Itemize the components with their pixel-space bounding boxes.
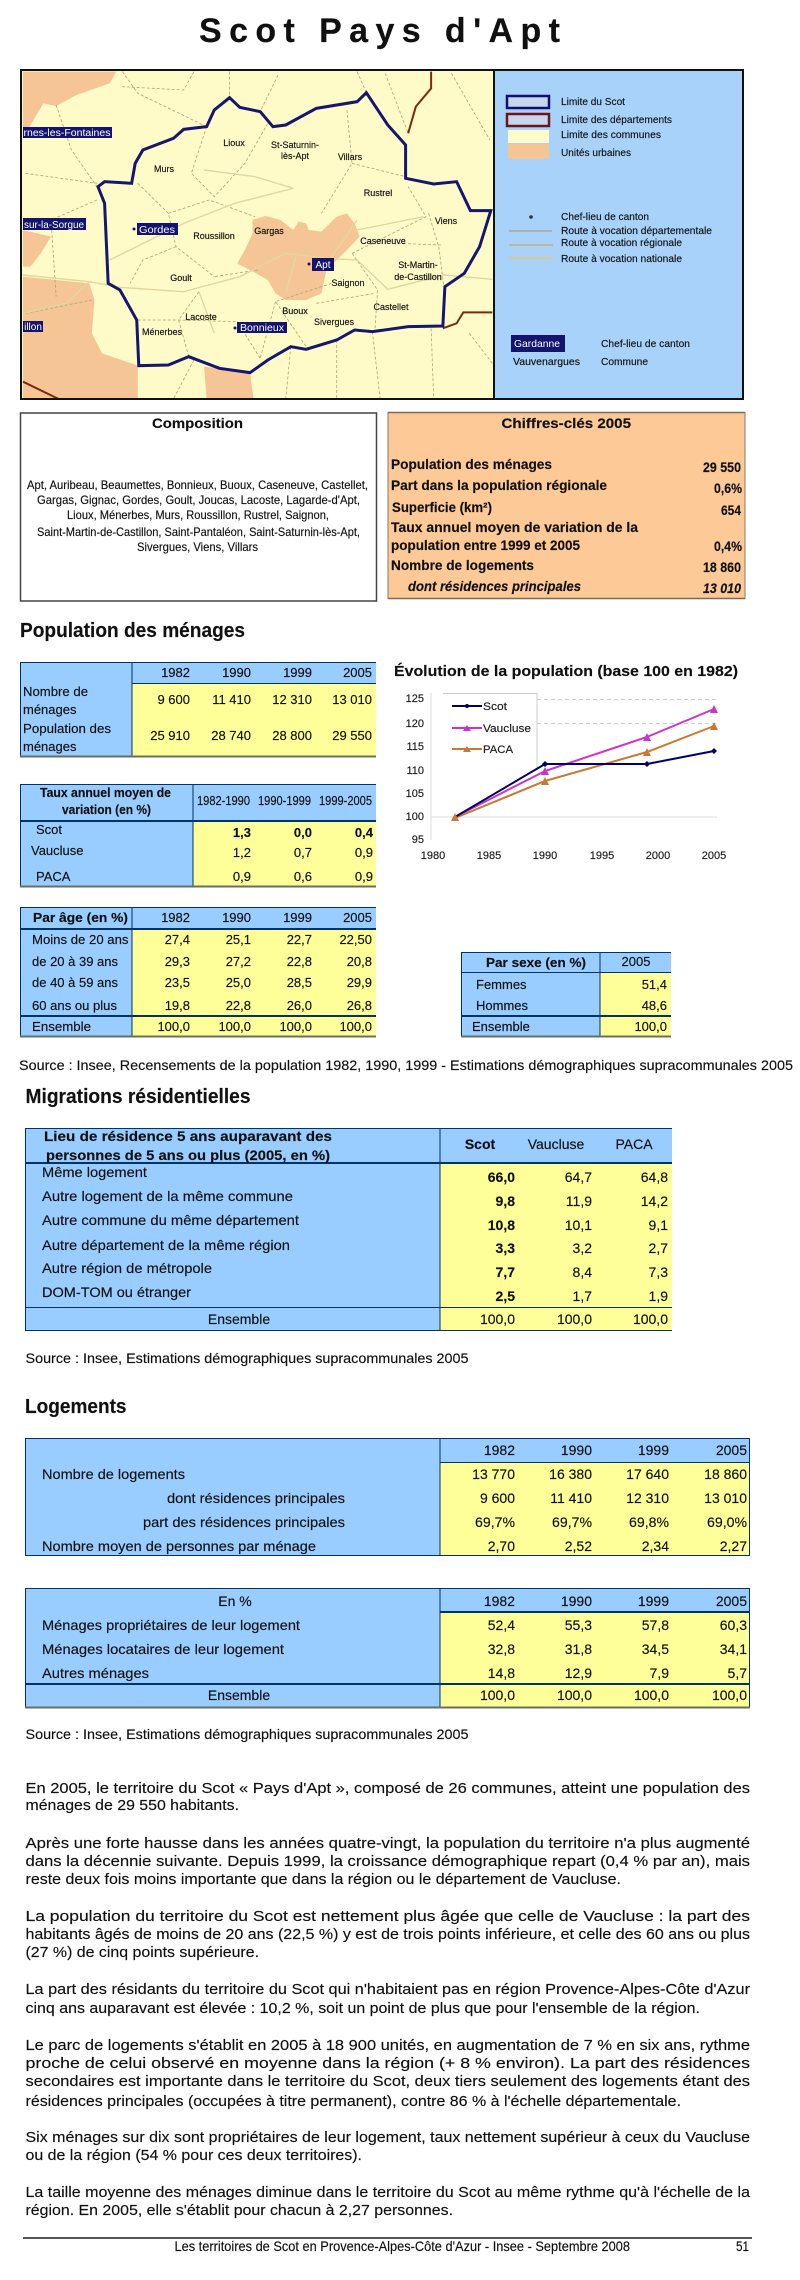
table: logements: Nombre moyen de personnes par ménage bbox=[42, 1538, 316, 1554]
table: par sexe: Hommes bbox=[476, 998, 529, 1013]
table: menages: 1982 bbox=[161, 665, 190, 680]
table: par age: 1999 bbox=[283, 910, 312, 925]
table: par age: de 20 à 39 ans bbox=[32, 954, 118, 969]
chiffres-cles rows: Nombre de logements bbox=[391, 557, 534, 573]
text block: commentary: La taille moyenne des ménages diminue dans le territoire du Scot au même rythme qu'à l'échelle de la bbox=[26, 2184, 751, 2201]
table: taux annuel moyen de variation: variation (en %) bbox=[62, 802, 151, 817]
map: canton capital labels: sur-la-Sorgue bbox=[24, 220, 84, 231]
chiffres-cles rows: 654 bbox=[721, 502, 741, 518]
table: menages: 1999 bbox=[283, 665, 312, 680]
text block: commentary: En 2005, le territoire du Scot « Pays d'Apt », composé de 26 communes, atteint une population des bbox=[26, 1780, 750, 1797]
heading: logements: Logements bbox=[25, 1396, 126, 1418]
map: commune labels: Castellet bbox=[373, 302, 409, 312]
chiffres-cles rows bbox=[391, 456, 742, 596]
map: commune labels: Gargas bbox=[254, 226, 284, 236]
table: logements: 2,27 bbox=[720, 1538, 747, 1554]
chiffres-cles rows: Superficie (km²) bbox=[392, 499, 492, 515]
table: migrations: Vaucluse bbox=[528, 1136, 584, 1152]
table: logements: 69,7% bbox=[552, 1514, 592, 1530]
chart legend: Vaucluse bbox=[483, 723, 531, 735]
chiffres-cles rows: dont résidences principales bbox=[408, 578, 581, 594]
map: commune labels: Sivergues bbox=[314, 317, 355, 327]
map legend: Chef-lieu de canton bbox=[601, 338, 690, 350]
chiffres-cles rows: 13 010 bbox=[703, 580, 741, 596]
panel: composition bbox=[20, 413, 376, 601]
table: par age: Moins de 20 ans bbox=[32, 932, 129, 947]
table: migrations: PACA bbox=[615, 1136, 653, 1152]
table: taux annuel moyen de variation: 0,7 bbox=[294, 845, 312, 860]
map: commune labels: Villars bbox=[338, 152, 363, 162]
table: taux annuel moyen de variation: 0,4 bbox=[355, 825, 374, 840]
table: statut d'occupation: 1999 bbox=[638, 1593, 669, 1609]
chiffres-cles rows: Taux annuel moyen de variation de la bbox=[391, 519, 638, 535]
table: menages: 25 910 bbox=[150, 728, 190, 743]
chiffres-cles heading: Chiffres-clés 2005 bbox=[502, 415, 631, 431]
map legend: Limite des communes bbox=[561, 129, 661, 141]
text block: commentary: secondaires est importante dans le territoire du Scot, deux tiers seulement des logements étant des bbox=[26, 2073, 750, 2090]
table: taux annuel moyen de variation: 1990-1999 bbox=[258, 793, 311, 808]
table: statut d'occupation: 34,1 bbox=[720, 1641, 747, 1657]
table: statut d'occupation: 57,8 bbox=[642, 1617, 669, 1633]
text block: commentary: cinq ans auparavant est élevée : 10,2 %, soit un point de plus que pour l'ensemble de la région. bbox=[26, 2000, 700, 2017]
chart plot bbox=[406, 693, 726, 862]
table: par age: 60 ans ou plus bbox=[32, 998, 117, 1013]
table: migrations: Même logement bbox=[42, 1164, 147, 1180]
chart plot: 95 bbox=[412, 834, 424, 846]
table: migrations: 2,5 bbox=[496, 1288, 515, 1304]
text block: commentary: Le parc de logements s'établit en 2005 à 18 900 unités, en augmentation de 7 % en six ans, rythme bbox=[26, 2037, 750, 2054]
table: logements: 1990 bbox=[561, 1442, 592, 1458]
table: statut d'occupation: 2005 bbox=[716, 1593, 747, 1609]
table: statut d'occupation: 60,3 bbox=[720, 1617, 747, 1633]
table: par age: 23,5 bbox=[165, 975, 190, 990]
table: statut d'occupation: 7,9 bbox=[650, 1665, 669, 1681]
map: commune labels: Buoux bbox=[282, 306, 308, 316]
table: statut d'occupation: 100,0 bbox=[712, 1687, 747, 1703]
table: statut d'occupation: Ménages propriétaires de leur logement bbox=[42, 1617, 300, 1633]
map: commune labels: Ménerbes bbox=[142, 327, 183, 337]
chiffres-cles rows: 0,6% bbox=[714, 480, 742, 496]
table: par age: 26,0 bbox=[287, 998, 312, 1013]
table: taux annuel moyen de variation: Vaucluse bbox=[31, 843, 84, 858]
map: commune labels: Lioux bbox=[223, 138, 245, 148]
table: logements: 11 410 bbox=[550, 1490, 592, 1506]
source: logements: Source : Insee, Estimations démographiques supracommunales 2005 bbox=[26, 1726, 469, 1742]
table: migrations: 9,1 bbox=[649, 1217, 668, 1233]
table: taux annuel moyen de variation: 1,2 bbox=[233, 845, 251, 860]
table: menages: 29 550 bbox=[332, 728, 372, 743]
table: par age: 26,8 bbox=[347, 998, 372, 1013]
panel: chiffres-cles 2005 bbox=[388, 412, 745, 599]
chiffres-cles rows: Population des ménages bbox=[391, 456, 552, 472]
table: migrations: Autre département de la même région bbox=[42, 1237, 290, 1253]
map legend: Route à vocation départementale bbox=[561, 225, 712, 237]
table: par age: 25,0 bbox=[226, 975, 251, 990]
table: migrations: 100,0 bbox=[480, 1311, 515, 1327]
chart plot: 1985 bbox=[477, 850, 501, 862]
table: logements: 2,70 bbox=[488, 1538, 515, 1554]
map legend: Unités urbaines bbox=[561, 147, 631, 159]
chart plot: 105 bbox=[406, 788, 424, 800]
table: migrations: 9,8 bbox=[496, 1193, 515, 1209]
chart legend bbox=[452, 701, 531, 756]
table: menages: Nombre de bbox=[23, 684, 88, 699]
text block: commentary: région. En 2005, elle s'établit pour chacun à 2,27 personnes. bbox=[26, 2202, 453, 2219]
table: par age: 100,0 bbox=[279, 1019, 312, 1034]
table: par age: 2005 bbox=[343, 910, 372, 925]
table: taux annuel moyen de variation: 0,9 bbox=[355, 845, 373, 860]
panel: map bbox=[21, 70, 743, 399]
source: migrations: Source : Insee, Estimations démographiques supracommunales 2005 bbox=[26, 1350, 469, 1366]
table: migrations: 1,9 bbox=[649, 1288, 668, 1304]
table: par age: 29,3 bbox=[165, 954, 190, 969]
chart title: Évolution de la population (base 100 en 1982) bbox=[394, 663, 738, 680]
title: Scot Pays d'Apt bbox=[199, 12, 560, 50]
table: migrations: Scot bbox=[465, 1136, 496, 1152]
table: logements: 2,34 bbox=[642, 1538, 669, 1554]
table: par age: 100,0 bbox=[157, 1019, 190, 1034]
table: migrations: 14,2 bbox=[641, 1193, 668, 1209]
table: migrations: 3,2 bbox=[573, 1240, 592, 1256]
table: par age: 1982 bbox=[161, 910, 190, 925]
chart plot: 100 bbox=[406, 811, 424, 823]
chart legend: PACA bbox=[483, 744, 514, 756]
text block: commentary: La population du territoire du Scot est nettement plus âgée que celle de Vaucluse : la part des bbox=[26, 1908, 750, 1925]
table: taux annuel moyen de variation: Scot bbox=[36, 822, 62, 837]
map: commune labels: Goult bbox=[170, 273, 192, 283]
table: logements: dont résidences principales bbox=[167, 1490, 345, 1506]
text block: commentary: ménages de 29 550 habitants. bbox=[26, 1797, 239, 1814]
table: logements: 2005 bbox=[716, 1442, 747, 1458]
chart plot: 2000 bbox=[646, 850, 670, 862]
table: statut d'occupation: 32,8 bbox=[488, 1641, 515, 1657]
text block: commentary: proche de celui observé en moyenne dans la région (+ 8 % environ). La part des résidences bbox=[26, 2055, 750, 2072]
composition list of communes: Lioux, Ménerbes, Murs, Roussillon, Rustrel, Saignon, bbox=[67, 508, 329, 522]
text block: commentary: Après une forte hausse dans les années quatre-vingt, la population du territoire n'a plus augmenté bbox=[26, 1835, 750, 1852]
table: migrations: 3,3 bbox=[496, 1240, 515, 1256]
map legend: Chef-lieu de canton bbox=[561, 211, 649, 223]
table: par age: Ensemble bbox=[32, 1019, 91, 1034]
table: logements: 13 010 bbox=[704, 1490, 747, 1506]
table: statut d'occupation: 52,4 bbox=[488, 1617, 515, 1633]
map: canton capital labels: illon bbox=[24, 322, 42, 333]
table: menages: 12 310 bbox=[272, 692, 312, 707]
table: migrations: 11,9 bbox=[566, 1193, 592, 1209]
table: taux annuel moyen de variation: Taux annuel moyen de bbox=[40, 785, 171, 800]
chart plot: 120 bbox=[406, 718, 424, 730]
table: logements: 2,52 bbox=[565, 1538, 592, 1554]
composition heading: Composition bbox=[152, 415, 243, 431]
map: canton capital labels: Gordes bbox=[139, 225, 175, 236]
table: logements: 69,7% bbox=[475, 1514, 515, 1530]
table: menages: 28 740 bbox=[211, 728, 251, 743]
map: commune labels: Roussillon bbox=[193, 231, 235, 241]
map: canton capital labels: Bonnieux bbox=[240, 323, 284, 334]
heading: population des menages: Population des ménages bbox=[20, 620, 245, 642]
table: logements: 1999 bbox=[638, 1442, 669, 1458]
footer: 51 bbox=[736, 2238, 749, 2254]
table: statut d'occupation: 1990 bbox=[561, 1593, 592, 1609]
table: logements: 69,0% bbox=[707, 1514, 747, 1530]
map shapes: urban units, roads, communes, Scot limit bbox=[23, 72, 492, 399]
table: menages: ménages bbox=[23, 702, 77, 717]
table: par sexe: Femmes bbox=[476, 977, 527, 992]
table: taux annuel moyen de variation: 0,0 bbox=[294, 825, 312, 840]
table: menages: 2005 bbox=[343, 665, 372, 680]
table: taux annuel moyen de variation: PACA bbox=[36, 869, 71, 884]
table: par sexe: Ensemble bbox=[472, 1019, 530, 1034]
text block: commentary: reste deux fois moins importante que dans la région ou le département de Vaucluse. bbox=[26, 1871, 621, 1888]
table: par sexe: 48,6 bbox=[642, 998, 667, 1013]
map legend bbox=[494, 70, 743, 399]
table: logements: 9 600 bbox=[480, 1490, 515, 1506]
table: menages: 9 600 bbox=[157, 692, 190, 707]
chiffres-cles rows: population entre 1999 et 2005 bbox=[391, 537, 580, 553]
composition list of communes: Saint-Martin-de-Castillon, Saint-Pantaléon, Saint-Saturnin-lès-Apt, bbox=[37, 525, 360, 539]
chart plot: 110 bbox=[406, 765, 424, 777]
table: statut d'occupation: Ensemble bbox=[208, 1687, 270, 1703]
table: migrations: 10,8 bbox=[488, 1217, 515, 1233]
map legend: Route à vocation régionale bbox=[561, 237, 682, 249]
table: par age: de 40 à 59 ans bbox=[32, 975, 118, 990]
table: menages bbox=[20, 662, 376, 757]
table: par age: 20,8 bbox=[347, 954, 372, 969]
table: migrations: 64,7 bbox=[565, 1169, 592, 1185]
table: menages: Population des bbox=[23, 721, 112, 736]
table: statut d'occupation: 34,5 bbox=[642, 1641, 669, 1657]
table: migrations: personnes de 5 ans ou plus (2005, en %) bbox=[46, 1147, 330, 1163]
table: par sexe bbox=[461, 952, 671, 1037]
table: par age: 100,0 bbox=[218, 1019, 251, 1034]
table: par age: Par âge (en %) bbox=[33, 910, 128, 925]
map legend: Vauvenargues bbox=[513, 356, 580, 368]
table: statut d'occupation: Autres ménages bbox=[42, 1665, 149, 1681]
text block: commentary bbox=[26, 1780, 751, 2219]
text block: commentary: ou de la région (54 % pour ces deux territoires). bbox=[26, 2147, 362, 2164]
table: logements: 13 770 bbox=[472, 1466, 515, 1482]
table: menages: 11 410 bbox=[212, 692, 251, 707]
map: commune labels: de-Castillon bbox=[394, 272, 442, 282]
map: commune labels: Saignon bbox=[331, 278, 365, 288]
table: migrations: 8,4 bbox=[573, 1264, 592, 1280]
text block: commentary: habitants âgés de moins de 20 ans (22,5 %) y est de trois points inférieure, et celle des 60 ans ou plus bbox=[26, 1926, 750, 1943]
table: taux annuel moyen de variation: 1982-1990 bbox=[197, 793, 250, 808]
table: par age: 22,8 bbox=[287, 954, 312, 969]
table: logements: 12 310 bbox=[626, 1490, 669, 1506]
map: commune labels: St-Saturnin- bbox=[271, 140, 319, 150]
table: taux annuel moyen de variation: 0,9 bbox=[233, 869, 251, 884]
chart plot: 1980 bbox=[421, 850, 445, 862]
source: population: Source : Insee, Recensements de la population 1982, 1990, 1999 - Estimations démographiques supracommunales 2005 bbox=[19, 1057, 793, 1073]
table: menages: 28 800 bbox=[272, 728, 312, 743]
chiffres-cles rows: Part dans la population régionale bbox=[391, 477, 607, 493]
chart plot: 125 bbox=[406, 693, 424, 705]
map: commune labels: Murs bbox=[154, 164, 174, 174]
table: migrations: 7,7 bbox=[496, 1264, 515, 1280]
map: commune labels: Lacoste bbox=[185, 312, 217, 322]
table: statut d'occupation: En % bbox=[218, 1593, 252, 1609]
table: migrations: Autre commune du même département bbox=[42, 1212, 299, 1228]
composition list of communes: Apt, Auribeau, Beaumettes, Bonnieux, Buoux, Caseneuve, Castellet, bbox=[27, 478, 368, 492]
table: logements: Nombre de logements bbox=[42, 1466, 185, 1482]
table: par sexe: 51,4 bbox=[642, 977, 667, 992]
table: migrations: 10,1 bbox=[565, 1217, 592, 1233]
map: commune labels bbox=[142, 138, 458, 337]
table: taux annuel moyen de variation: 0,6 bbox=[294, 869, 312, 884]
table: statut d'occupation: Ménages locataires de leur logement bbox=[42, 1641, 284, 1657]
table: statut d'occupation: 100,0 bbox=[557, 1687, 592, 1703]
table: par age: 27,2 bbox=[226, 954, 251, 969]
table: migrations: Autre région de métropole bbox=[42, 1260, 212, 1276]
table: statut d'occupation: 1982 bbox=[484, 1593, 515, 1609]
footer: Les territoires de Scot en Provence-Alpes-Côte d'Azur - Insee - Septembre 2008 bbox=[174, 2238, 630, 2254]
text block: commentary: (27 %) de cinq points supérieure. bbox=[26, 1944, 259, 1961]
table: par age bbox=[20, 907, 376, 1037]
table: migrations: Ensemble bbox=[208, 1311, 270, 1327]
chiffres-cles rows: 0,4% bbox=[714, 538, 742, 554]
table: migrations: 100,0 bbox=[633, 1311, 668, 1327]
table: taux annuel moyen de variation: 1,3 bbox=[233, 825, 251, 840]
footer bbox=[23, 2238, 752, 2254]
chart plot: 115 bbox=[406, 741, 424, 753]
chart: evolution de la population bbox=[394, 663, 738, 862]
table: par age: 22,7 bbox=[287, 932, 312, 947]
composition list of communes: Gargas, Gignac, Gordes, Goult, Joucas, Lacoste, Lagarde-d'Apt, bbox=[37, 493, 360, 507]
table: par sexe: 2005 bbox=[622, 954, 650, 969]
map: canton capital labels bbox=[23, 127, 334, 334]
map: commune labels: Rustrel bbox=[364, 188, 392, 198]
table: migrations: 7,3 bbox=[649, 1264, 668, 1280]
table: statut d'occupation bbox=[25, 1588, 750, 1708]
table: logements: part des résidences principales bbox=[143, 1514, 345, 1530]
table: logements: 16 380 bbox=[549, 1466, 592, 1482]
table: taux annuel moyen de variation: 1999-2005 bbox=[319, 793, 372, 808]
table: logements: 69,8% bbox=[629, 1514, 669, 1530]
heading: migrations residentielles: Migrations résidentielles bbox=[26, 1086, 250, 1108]
table: statut d'occupation: 100,0 bbox=[480, 1687, 515, 1703]
chart plot: 1995 bbox=[590, 850, 614, 862]
table: migrations: 100,0 bbox=[557, 1311, 592, 1327]
table: taux annuel moyen de variation: 0,9 bbox=[355, 869, 373, 884]
table: menages: ménages bbox=[23, 739, 77, 754]
composition list of communes bbox=[27, 478, 368, 554]
table: statut d'occupation: 31,8 bbox=[565, 1641, 592, 1657]
table: par age: 28,5 bbox=[287, 975, 312, 990]
table: logements: 18 860 bbox=[704, 1466, 747, 1482]
table: migrations: DOM-TOM ou étranger bbox=[42, 1284, 191, 1300]
table: statut d'occupation: 14,8 bbox=[488, 1665, 515, 1681]
table: migrations: 64,8 bbox=[641, 1169, 668, 1185]
map legend: Commune bbox=[601, 356, 648, 368]
chiffres-cles rows: 18 860 bbox=[703, 559, 741, 575]
text block: commentary: La part des résidants du territoire du Scot qui n'habitaient pas en région Provence-Alpes-Côte d'Azur bbox=[26, 1981, 750, 1998]
chart plot: 2005 bbox=[702, 850, 726, 862]
map: commune labels: Caseneuve bbox=[360, 236, 406, 246]
map legend: Gardanne bbox=[514, 338, 560, 350]
table: par age: 19,8 bbox=[165, 998, 190, 1013]
table: par age: 100,0 bbox=[339, 1019, 372, 1034]
text block: commentary: résidences principales (occupées à titre permanent), contre 86 % à l'échelle départementale. bbox=[26, 2093, 681, 2110]
table: migrations: 66,0 bbox=[488, 1169, 515, 1185]
composition list of communes: Sivergues, Viens, Villars bbox=[137, 540, 258, 554]
table: logements: 17 640 bbox=[626, 1466, 669, 1482]
table: statut d'occupation: 5,7 bbox=[728, 1665, 747, 1681]
map: commune labels: Viens bbox=[435, 216, 458, 226]
chiffres-cles rows: 29 550 bbox=[703, 459, 741, 475]
table: par age: 22,8 bbox=[226, 998, 251, 1013]
table: migrations: Lieu de résidence 5 ans auparavant des bbox=[44, 1128, 332, 1144]
table: menages: 1990 bbox=[222, 665, 251, 680]
table: migrations: 1,7 bbox=[573, 1288, 592, 1304]
table: par sexe: 100,0 bbox=[634, 1019, 667, 1034]
table: par age: 27,4 bbox=[165, 932, 190, 947]
table: logements: 1982 bbox=[484, 1442, 515, 1458]
table: par sexe: Par sexe (en %) bbox=[486, 955, 586, 970]
map: canton capital labels: Apt bbox=[315, 260, 331, 271]
map legend: Limite du Scot bbox=[561, 96, 625, 108]
table: statut d'occupation: 100,0 bbox=[634, 1687, 669, 1703]
map: commune labels: lès-Apt bbox=[281, 151, 310, 161]
chart legend: Scot bbox=[483, 701, 507, 713]
table: migrations: 2,7 bbox=[649, 1240, 668, 1256]
table: taux annuel moyen de variation bbox=[20, 784, 376, 887]
table: menages: 13 010 bbox=[332, 692, 372, 707]
map legend: Limite des départements bbox=[561, 114, 672, 126]
chart plot: 1990 bbox=[533, 850, 557, 862]
table: statut d'occupation: 12,9 bbox=[565, 1665, 592, 1681]
map: commune labels: St-Martin- bbox=[398, 260, 438, 270]
text block: commentary: dans la décennie suivante. Depuis 1999, la croissance démographique repart (0,4 % par an), mais bbox=[26, 1853, 750, 1870]
table: par age: 22,50 bbox=[339, 932, 372, 947]
table: par age: 25,1 bbox=[226, 932, 251, 947]
table: par age: 1990 bbox=[222, 910, 251, 925]
map legend: Route à vocation nationale bbox=[561, 253, 682, 265]
table: migrations bbox=[25, 1128, 672, 1331]
table: statut d'occupation: 55,3 bbox=[565, 1617, 592, 1633]
map: canton capital labels: rnes-les-Fontaines bbox=[24, 128, 110, 139]
table: par age: 29,9 bbox=[347, 975, 372, 990]
text block: commentary: Six ménages sur dix sont propriétaires de leur logement, taux nettement supérieur à ceux du Vaucluse bbox=[26, 2129, 750, 2146]
table: logements bbox=[25, 1438, 750, 1556]
table: migrations: Autre logement de la même commune bbox=[42, 1188, 293, 1204]
